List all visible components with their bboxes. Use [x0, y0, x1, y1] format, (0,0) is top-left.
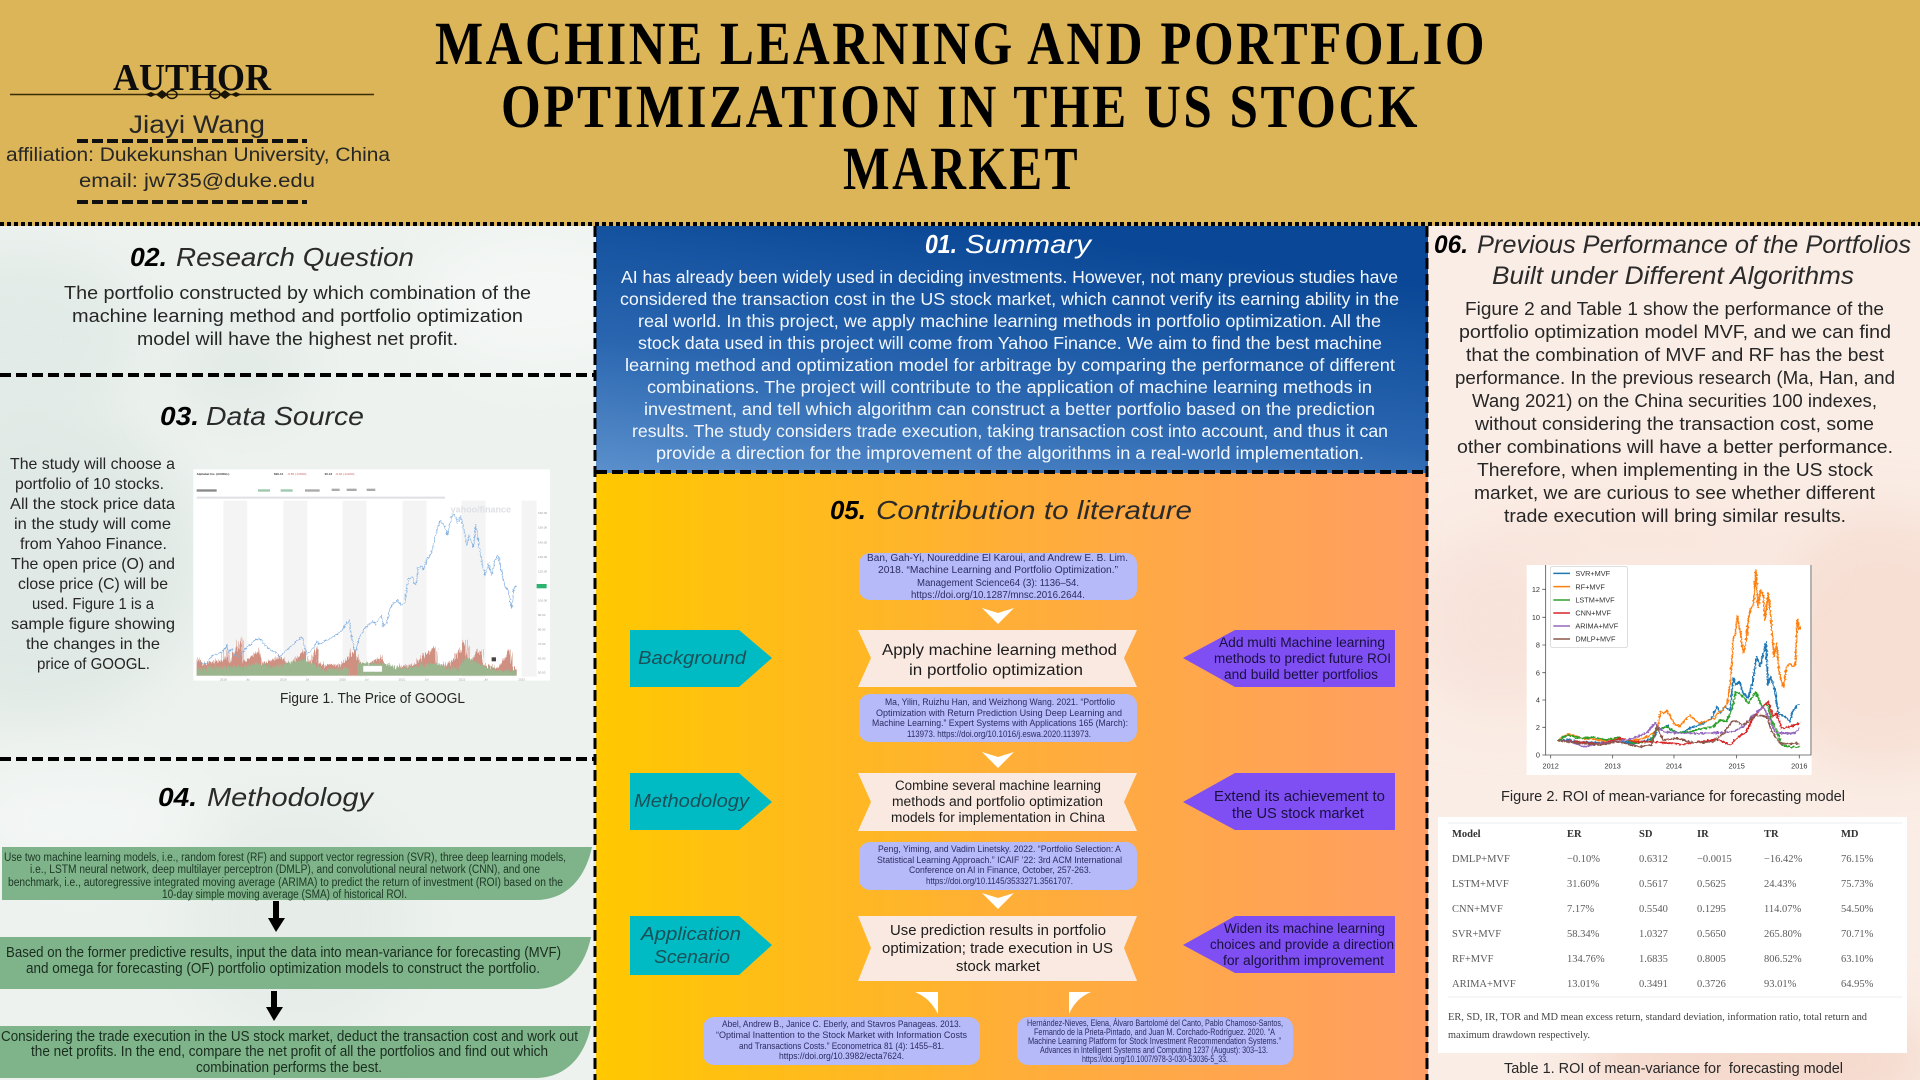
previous performance text: other combinations will have a better performance.	[1457, 437, 1893, 457]
heading: previous performance: 06.	[1434, 231, 1468, 259]
data source text: from Yahoo Finance.	[20, 536, 167, 553]
summary text: real world. In this project, we apply machine learning methods in portfolio optimization. All the	[638, 311, 1381, 331]
table: ROI results: 0.3491	[1639, 979, 1668, 990]
arrow: chevron 3	[982, 893, 1014, 909]
reference box: Peng and Linetsky	[859, 842, 1137, 890]
previous performance text: portfolio optimization model MVF, and we can find	[1459, 322, 1891, 342]
table: ROI results: 70.71%	[1841, 929, 1874, 940]
table: ROI results: 64.95%	[1841, 979, 1874, 990]
arrow: step 2 to step 3	[266, 991, 283, 1021]
table: ROI results: −16.42%	[1764, 854, 1803, 865]
summary text: combinations. The project will contribute to the application of machine learning methods in	[647, 377, 1372, 397]
data source text: portfolio of 10 stocks.	[15, 476, 164, 493]
table: ROI results: 75.73%	[1841, 879, 1874, 890]
table: ROI results: 134.76%	[1567, 954, 1605, 965]
title: OPTIMIZATION IN THE US STOCK	[501, 74, 1420, 141]
heading: previous performance: Previous Performance of the Portfolios	[1477, 231, 1911, 259]
research question text: model will have the highest net profit.	[137, 328, 458, 349]
table: ROI results: 0.1295	[1697, 904, 1726, 915]
author heading: AUTHOR	[113, 57, 272, 99]
summary text: learning method and optimization model for arbitrage by comparing the performance of different	[625, 355, 1395, 375]
table: ROI results: TR	[1764, 829, 1779, 840]
callout: widen choices: Widen its machine learning	[1224, 921, 1385, 936]
table: ROI results: MD	[1841, 829, 1859, 840]
banner: use prediction results: Use prediction results in portfolio	[890, 923, 1106, 939]
step 1 box: 10-day simple moving average (SMA) of historical ROI.	[162, 889, 407, 901]
chart: GOOGL price: Jul	[365, 677, 369, 681]
banner: apply machine learning: Apply machine learning method	[882, 642, 1117, 659]
chart legend	[1551, 567, 1627, 647]
chart: GOOGL price: -0.55 (-0.59%)	[287, 472, 306, 476]
callout: add multi machine learning: methods to predict future ROI	[1214, 651, 1391, 666]
table: ROI results: 13.01%	[1567, 979, 1600, 990]
label: background: Background	[638, 648, 747, 668]
table: ROI results: 1.0327	[1639, 929, 1668, 940]
summary text: considered the transaction cost in the US stock market, which cannot verify its earning ability in the	[620, 289, 1399, 309]
table: ROI results: SD	[1639, 829, 1653, 840]
panel: research question	[64, 242, 531, 349]
heading: previous performance: Built under Different Algorithms	[1492, 262, 1854, 290]
chart: ROI line chart: 2015	[1728, 761, 1745, 770]
step 3 box: the net profits. In the end, compare the net profit of all the portfolios and find out which	[31, 1044, 548, 1060]
chart: ROI line chart: 4	[1536, 696, 1540, 705]
chart: ROI line chart: 2	[1536, 723, 1540, 732]
table: ROI results: LSTM+MVF	[1452, 879, 1509, 890]
data source text: price of GOOGL.	[37, 656, 150, 673]
summary text: results. The study considers trade execution, taking transaction cost into account, and thus it can	[632, 421, 1388, 441]
callout: extend achievement: the US stock market	[1232, 806, 1364, 822]
step 3 box: combination performs the best.	[196, 1060, 382, 1076]
reference box: Hernandez-Nieves et al.: Hernández-Nieves, Elena, Álvaro Bartolomé del Canto, Pablo Chamoso-Santos,	[1027, 1018, 1283, 1028]
table: ROI results: 0.5540	[1639, 904, 1668, 915]
reference box: Ma et al.: Ma, Yilin, Ruizhu Han, and Weizhong Wang. 2021. “Portfolio	[885, 697, 1115, 708]
reference box: Peng and Linetsky: Peng, Yiming, and Vadim Linetsky. 2022. “Portfolio Selection: A	[878, 844, 1122, 855]
chart: GOOGL price: 60.00	[538, 656, 546, 660]
label: methodology	[630, 773, 772, 830]
table: ROI results: 265.80%	[1764, 929, 1802, 940]
chart: GOOGL price: Jul	[425, 677, 429, 681]
data source text: The study will choose a	[10, 456, 175, 473]
label: application scenario: Scenario	[654, 947, 730, 967]
callout: extend achievement: Extend its achievement to	[1214, 789, 1385, 805]
reference box: Ma et al.: 113973. https://doi.org/10.1016/j.eswa.2020.113973.	[907, 729, 1091, 740]
label: application scenario	[630, 916, 772, 975]
chart legend: LSTM+MVF	[1575, 596, 1615, 605]
table: ROI results: 114.07%	[1764, 904, 1801, 915]
chart: GOOGL price: 2019	[280, 677, 287, 681]
chart: ROI line chart: 8	[1536, 641, 1540, 650]
heading: summary: 01.	[925, 229, 957, 259]
email: email: jw735@duke.edu	[79, 170, 315, 192]
chart: GOOGL price: 2022	[459, 677, 466, 681]
table: ROI results: ER	[1567, 829, 1582, 840]
header band	[0, 0, 1920, 226]
heading: summary	[925, 229, 1093, 259]
step 3 box	[0, 1026, 591, 1078]
banner: combine several methods: models for implementation in China	[891, 810, 1105, 825]
reference box: Hernandez-Nieves et al.: Machine Learning Platform for Stock Investment Recommendation Systems.”	[1028, 1036, 1281, 1046]
research question text: machine learning method and portfolio optimization	[72, 305, 523, 326]
heading: data source: Data Source	[206, 401, 364, 431]
chart: GOOGL price: 80.00	[538, 628, 546, 632]
table: ROI results: 93.01%	[1764, 979, 1797, 990]
heading: data source: 03.	[160, 401, 199, 431]
title	[435, 11, 1487, 203]
reference box: Ban et al.	[859, 553, 1137, 601]
label: background	[630, 630, 772, 687]
chart: GOOGL price: Jul	[246, 677, 250, 681]
chart: GOOGL price: 90.00	[538, 613, 546, 617]
table: ROI results: 63.10%	[1841, 954, 1874, 965]
table: ROI results: SVR+MVF	[1452, 929, 1501, 940]
table: ROI results: 24.43%	[1764, 879, 1797, 890]
step 1 box: i.e., LSTM neural network, deep multilayer perceptron (DMLP), and convolutional neural network (CNN), and one	[30, 864, 540, 876]
reference box: Peng and Linetsky: https://doi.org/10.1145/3533271.3561707.	[926, 876, 1073, 887]
data source text: sample figure showing	[11, 616, 175, 633]
chart: GOOGL price: Jul	[484, 677, 488, 681]
chart legend: SVR+MVF	[1575, 569, 1611, 578]
banner: combine several methods	[858, 773, 1137, 831]
table: ROI results: ER, SD, IR, TOR and MD mean excess return, standard deviation, information ratio, total return and	[1448, 1012, 1868, 1023]
previous performance text: performance. In the previous research (Ma, Han, and	[1455, 368, 1895, 388]
step 1 box: Use two machine learning models, i.e., random forest (RF) and support vector regression (SVR), three deep learning models,	[4, 852, 566, 864]
callout: add multi machine learning: Add multi Machine learning	[1219, 635, 1385, 650]
panel: contribution to literature	[596, 473, 1428, 1080]
heading: methodology	[158, 782, 375, 812]
table: ROI results: RF+MVF	[1452, 954, 1494, 965]
step 3 box: Considering the trade execution in the US stock market, deduct the transaction cost and work out	[1, 1029, 578, 1045]
data source text: the changes in the	[26, 636, 160, 653]
reference box: Abel et al.: https://doi.org/10.3982/ecta7624.	[779, 1051, 904, 1062]
heading: research question: 02.	[130, 242, 167, 272]
chart: GOOGL price: 160.00	[538, 511, 547, 515]
table: ROI results: 76.15%	[1841, 854, 1874, 865]
reference box: Abel et al.: Abel, Andrew B., Janice C. Eberly, and Stavros Panageas. 2013.	[722, 1019, 961, 1030]
chart: ROI line chart: 12	[1532, 585, 1540, 594]
table: ROI results: 0.3726	[1697, 979, 1726, 990]
chart: GOOGL price: Jul	[305, 677, 309, 681]
reference box: Abel et al.	[703, 1017, 980, 1065]
previous performance text	[1455, 299, 1895, 526]
heading: previous performance	[1434, 231, 1911, 290]
chart legend: DMLP+MVF	[1575, 635, 1616, 644]
arrow: step 1 to step 2	[268, 901, 285, 932]
previous performance text: Figure 2 and Table 1 show the performance of the	[1465, 299, 1884, 319]
research question text	[64, 282, 531, 349]
arrow: triangle to Hernandez reference	[1069, 992, 1091, 1014]
banner: apply machine learning: in portfolio optimization	[909, 662, 1083, 679]
reference box: Hernandez-Nieves et al.: https://doi.org/10.1007/978-3-030-53036-5_33.	[1082, 1054, 1228, 1064]
title: MACHINE LEARNING AND PORTFOLIO	[435, 11, 1487, 78]
data source text: The open price (O) and	[11, 556, 175, 573]
summary text: provide a direction for the improvement of the algorithms in a real-world implementation.	[656, 443, 1364, 463]
chart: GOOGL price: 130.00	[538, 555, 547, 559]
banner: combine several methods: Combine several machine learning	[895, 778, 1101, 793]
table: ROI results: 0.5650	[1697, 929, 1726, 940]
panel: data source	[10, 401, 550, 707]
previous performance text: market, we are curious to see whether different	[1474, 483, 1875, 503]
reference box: Ban et al.: Ban, Gah-Yi, Noureddine El Karoui, and Andrew E. B. Lim.	[867, 553, 1128, 564]
banner: combine several methods: methods and portfolio optimization	[892, 794, 1103, 809]
arrow: chevron 2	[982, 752, 1014, 768]
table: ROI results: −0.0015	[1697, 854, 1732, 865]
table: ROI results: 0.8005	[1697, 954, 1726, 965]
reference box: Abel et al.: and Transactions Costs.” Econometrica 81 (4): 1455–81.	[739, 1041, 944, 1052]
callout: widen choices: choices and provide a direction	[1210, 937, 1394, 952]
table: ROI results: 0.5617	[1639, 879, 1668, 890]
title: MARKET	[843, 136, 1080, 203]
heading: summary: Summary	[965, 229, 1093, 259]
chart: ROI line chart: 10	[1532, 613, 1540, 622]
callout: widen choices	[1183, 916, 1395, 973]
caption: figure 2: Figure 2. ROI of mean-variance for forecasting model	[1501, 789, 1845, 805]
chart: ROI line chart	[1527, 565, 1812, 775]
chart: GOOGL price: 150.00	[538, 526, 547, 530]
heading: methodology: 04.	[158, 782, 197, 812]
chart: ROI line chart: 2012	[1543, 761, 1559, 770]
heading: research question: Research Question	[176, 242, 414, 272]
chart: ROI line chart: 0	[1536, 751, 1540, 760]
table: ROI results: maximum drawdown respectively.	[1448, 1030, 1590, 1041]
step 1 box: benchmark, i.e., autoregressive integrated moving average (ARIMA) to predict the return of investment (ROI) based on the	[8, 877, 563, 889]
reference box: Hernandez-Nieves et al.: Advances in Intelligent Systems and Computing 1237 (August): 303–13.	[1040, 1045, 1268, 1055]
panel: summary	[596, 226, 1428, 473]
chart: GOOGL price: 2020	[339, 677, 346, 681]
affiliation: affiliation: Dukekunshan University, China	[6, 144, 390, 166]
table: ROI results: ARIMA+MVF	[1452, 979, 1516, 990]
banner: apply machine learning	[858, 630, 1137, 687]
summary text	[620, 267, 1399, 463]
chart: GOOGL price: $90.44	[274, 472, 283, 476]
chart legend: ARIMA+MVF	[1575, 622, 1619, 631]
chart: GOOGL price: 70.00	[538, 642, 546, 646]
table: ROI results: 7.17%	[1567, 904, 1594, 915]
author name: Jiayi Wang	[129, 111, 265, 139]
summary text: stock data used in this project will come from Yahoo Finance. We aim to find the best machine	[638, 333, 1382, 353]
chart: GOOGL price: 2018	[220, 677, 227, 681]
previous performance text: without considering the transaction cost, some	[1474, 414, 1874, 434]
table: ROI results: −0.10%	[1567, 854, 1600, 865]
panel: right column background	[1410, 226, 1920, 1080]
callout: widen choices: for algorithm improvement	[1223, 953, 1384, 968]
previous performance text: Therefore, when implementing in the US stock	[1477, 460, 1874, 480]
previous performance text: that the combination of MVF and RF has the best	[1466, 345, 1884, 365]
chart: ROI line chart: 2013	[1604, 761, 1621, 770]
panel: methodology	[0, 782, 592, 1078]
table: ROI results	[1438, 817, 1907, 1053]
previous performance text: trade execution will bring similar results.	[1504, 506, 1846, 526]
chart: GOOGL price: Alphabet Inc. (GOOGL)	[197, 472, 229, 476]
reference box: Ma et al.: Optimization with Return Prediction Using Deep Learning and	[876, 708, 1122, 719]
label: application scenario: Application	[640, 924, 741, 944]
chart: GOOGL price: 2021	[399, 677, 406, 681]
banner: use prediction results: optimization; trade execution in US	[882, 941, 1113, 957]
table: ROI results: 806.52%	[1764, 954, 1802, 965]
panel: previous performance	[1434, 231, 1911, 1077]
heading: contribution: Contribution to literature	[876, 495, 1192, 525]
data source text: All the stock price data	[10, 496, 175, 513]
table: ROI results: CNN+MVF	[1452, 904, 1503, 915]
reference box: Ban et al.: 2018. “Machine Learning and Portfolio Optimization.”	[878, 565, 1118, 576]
callout: add multi machine learning	[1183, 630, 1395, 687]
chart: GOOGL price: 140.00	[538, 540, 547, 544]
summary text: AI has already been widely used in deciding investments. However, not many previous studies have	[621, 267, 1398, 287]
chart legend: CNN+MVF	[1575, 609, 1611, 618]
reference box: Peng and Linetsky: Statistical Learning Approach.” ICAIF ’22: 3rd ACM International	[877, 855, 1122, 866]
panel: left column background	[0, 226, 660, 1080]
heading: contribution: 05.	[830, 495, 866, 525]
chart: GOOGL price: -0.02 (-0.02%)	[335, 472, 354, 476]
callout: add multi machine learning: and build better portfolios	[1224, 667, 1378, 682]
step 1 box	[2, 847, 592, 901]
reference box: Ma et al.	[859, 694, 1137, 742]
chart: GOOGL price: 2023	[518, 677, 525, 681]
chart: GOOGL price	[190, 469, 550, 681]
data source text: close price (C) will be	[18, 576, 168, 593]
arrow: triangle to Abel reference	[915, 992, 938, 1014]
reference box: Ban et al.: Management Science64 (3): 1136–54.	[917, 578, 1079, 589]
chart: GOOGL price: 100.00	[538, 599, 547, 603]
table: ROI results: 54.50%	[1841, 904, 1874, 915]
panel: author	[6, 57, 390, 202]
callout: extend achievement	[1183, 773, 1395, 830]
data source text: in the study will come	[14, 516, 171, 533]
data source text: used. Figure 1 is a	[32, 596, 154, 613]
banner: use prediction results: stock market	[956, 959, 1040, 975]
reference box: Hernandez-Nieves et al.	[1017, 1017, 1293, 1065]
step 2 box: and omega for forecasting (OF) portfolio optimization models to construct the portfolio.	[26, 961, 540, 977]
chart: GOOGL price: 50.00	[538, 671, 546, 675]
data source text	[10, 456, 175, 673]
chart legend: RF+MVF	[1575, 582, 1605, 591]
chart: GOOGL price: 90.43	[325, 472, 332, 476]
caption: figure 1: Figure 1. The Price of GOOGL	[280, 691, 465, 707]
arrow: chevron 1	[982, 608, 1014, 624]
table: ROI results: DMLP+MVF	[1452, 854, 1510, 865]
reference box: Hernandez-Nieves et al.: Fernando de la Prieta-Pintado, and Juan M. Corchado-Rodríguez. 2020. “A	[1034, 1027, 1275, 1037]
heading: methodology: Methodology	[207, 782, 375, 812]
table: ROI results: 0.6312	[1639, 854, 1668, 865]
table: ROI results: 58.34%	[1567, 929, 1600, 940]
chart: GOOGL price: yahoo/finance	[451, 505, 511, 515]
table: ROI results: 31.60%	[1567, 879, 1600, 890]
reference box: Ma et al.: Machine Learning.” Expert Systems with Applications 165 (March):	[872, 718, 1128, 729]
caption: table 1: Table 1. ROI of mean-variance for forecasting model	[1504, 1061, 1843, 1077]
previous performance text: Wang 2021) on the China securities 100 indexes,	[1472, 391, 1877, 411]
reference box: Abel et al.: “Optimal Inattention to the Stock Market with Information Costs	[716, 1030, 967, 1041]
reference box: Ban et al.: https://doi.org/10.1287/mnsc.2016.2644.	[911, 590, 1085, 601]
table: ROI results: 1.6835	[1639, 954, 1668, 965]
chart: ROI line chart: 2014	[1666, 761, 1682, 770]
label: methodology: Methodology	[634, 791, 750, 811]
step 2 box: Based on the former predictive results, input the data into mean-variance for forecasting (MVF)	[6, 945, 561, 961]
table: ROI results: Model	[1452, 829, 1481, 840]
author ornament rule	[10, 90, 374, 99]
chart: ROI line chart: 2016	[1791, 761, 1807, 770]
table: ROI results: IR	[1697, 829, 1709, 840]
summary text: investment, and tell which algorithm can construct a better portfolio based on the prediction	[644, 399, 1375, 419]
table: ROI results: 0.5625	[1697, 879, 1726, 890]
reference box: Peng and Linetsky: Conference on AI in Finance, October, 257-263.	[909, 865, 1091, 876]
research question text: The portfolio constructed by which combination of the	[64, 282, 531, 303]
chart: GOOGL price: 120.00	[538, 570, 547, 574]
chart: ROI line chart: 6	[1536, 668, 1540, 677]
step 2 box	[0, 937, 591, 989]
banner: use prediction results	[858, 916, 1137, 981]
